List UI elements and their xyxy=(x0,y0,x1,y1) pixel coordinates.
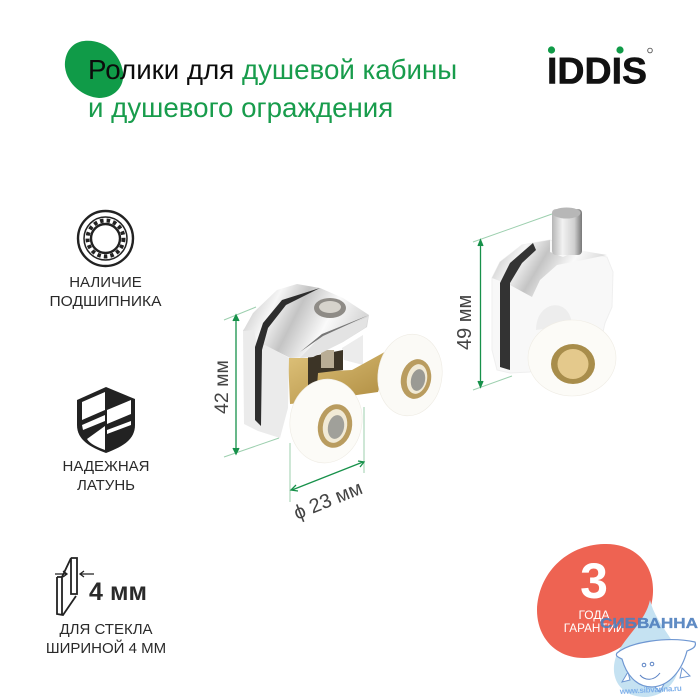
screw xyxy=(321,350,334,368)
brand text: СИБВАННА xyxy=(600,615,698,632)
clamp plate xyxy=(243,312,289,438)
warranty badge xyxy=(537,544,653,658)
title line 1: Ролики для душевой кабины xyxy=(88,54,457,85)
label: ДЛЯ СТЕКЛА xyxy=(59,621,153,638)
dimension: 23 mm xyxy=(290,407,366,525)
logo: IDDIS: IDDIS xyxy=(547,50,647,92)
dimension: 49 mm xyxy=(454,214,552,390)
body xyxy=(492,240,613,373)
label: НАЛИЧИЕ xyxy=(69,274,142,291)
dimension: 42 mm xyxy=(211,307,279,457)
icon: glass pane xyxy=(55,558,94,615)
feature: bearing: ПОДШИПНИКА xyxy=(50,293,162,310)
pin xyxy=(552,209,582,255)
gasket xyxy=(255,288,320,426)
label: 4 mm: 4 мм xyxy=(89,578,147,606)
wheel xyxy=(528,320,616,396)
tub feet xyxy=(622,668,690,692)
arch shadow xyxy=(536,305,572,330)
feature: glass width: ШИРИНОЙ 4 ММ xyxy=(46,639,166,657)
face xyxy=(640,662,660,679)
gasket xyxy=(500,243,536,370)
dark interior xyxy=(308,350,343,400)
drop xyxy=(614,600,679,697)
dimension: 42 mm: 42 мм xyxy=(211,360,233,414)
brass arm xyxy=(288,348,392,404)
clamp top xyxy=(243,284,369,358)
feature: bearing xyxy=(50,211,162,310)
chrome band xyxy=(492,240,607,297)
red blob xyxy=(537,544,653,658)
feature: brass xyxy=(62,387,150,494)
icon: bearing xyxy=(78,211,133,266)
icon: shield xyxy=(77,387,135,453)
dimension: 49 mm: 49 мм xyxy=(454,295,476,350)
feature: glass width xyxy=(46,558,166,657)
dimension: 23 mm: ϕ 23 мм xyxy=(291,477,366,525)
product: single roller xyxy=(492,208,616,396)
url: www.sibvanna.ru xyxy=(619,684,682,696)
feature: brass: ЛАТУНЬ xyxy=(77,477,135,494)
back plate xyxy=(342,335,363,365)
clamp shadow xyxy=(300,317,368,358)
title xyxy=(65,41,457,123)
tub xyxy=(616,640,695,687)
warranty badge: ГАРАНТИИ xyxy=(564,622,624,635)
watermark: Sibvanna xyxy=(600,600,698,697)
number 3: 3 xyxy=(580,553,608,609)
screw head xyxy=(314,298,346,318)
green blob xyxy=(65,41,123,98)
label: ГОДА xyxy=(578,608,610,622)
rear wheel xyxy=(373,330,447,420)
product: double roller xyxy=(243,284,447,468)
title line 2: и душевого ограждения xyxy=(88,92,393,123)
label: НАДЕЖНАЯ xyxy=(62,458,150,475)
front wheel xyxy=(285,374,367,468)
